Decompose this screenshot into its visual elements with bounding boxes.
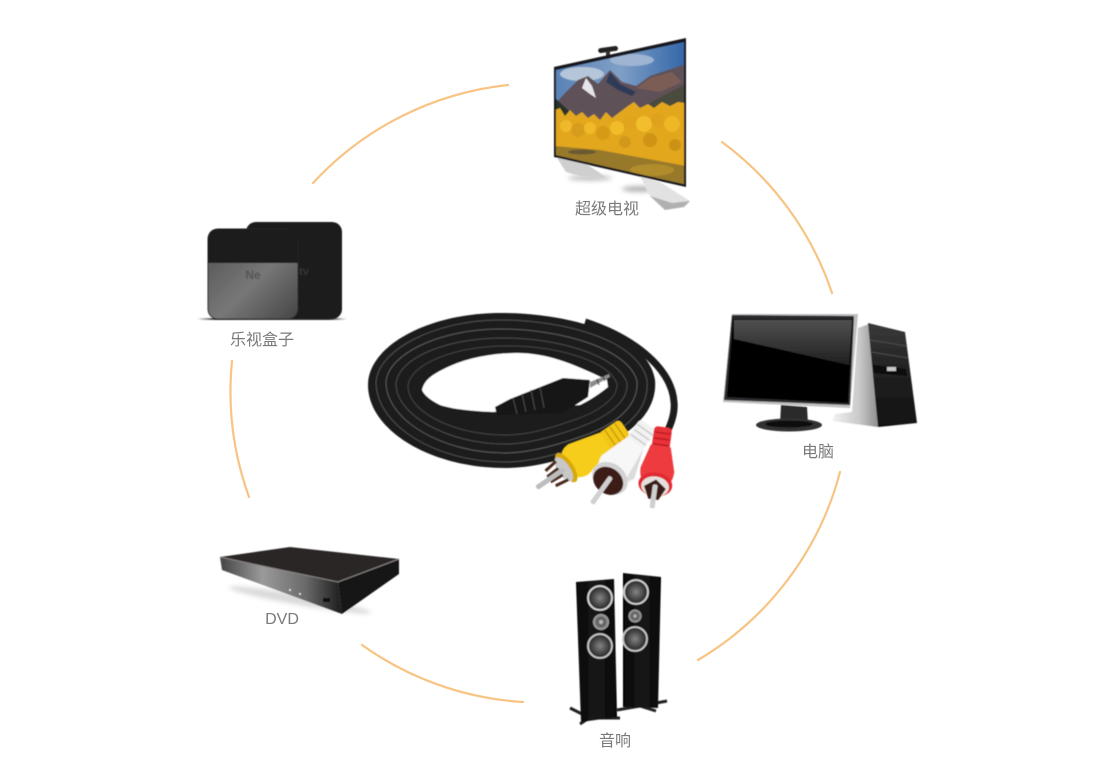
box shadow bbox=[197, 318, 347, 320]
AV cable bbox=[368, 313, 680, 515]
label: LeTV box: 乐视盒子 bbox=[230, 331, 294, 349]
monitor stand bbox=[756, 405, 822, 432]
outer strand bbox=[585, 322, 674, 432]
ring of orange arcs bbox=[230, 85, 840, 702]
device: desktop computer bbox=[723, 314, 917, 432]
label: computer: 电脑 bbox=[802, 443, 834, 461]
label: DVD: DVD bbox=[265, 611, 299, 628]
cable coil bbox=[368, 313, 655, 468]
rear box bbox=[246, 222, 342, 319]
infographic: devices around AV cable bbox=[198, 37, 918, 748]
3.5mm jack plug bbox=[495, 374, 610, 415]
DVD shadow bbox=[228, 583, 372, 617]
label: super TV: 超级电视 bbox=[575, 200, 639, 218]
front box bbox=[208, 229, 298, 319]
device: LeTV box bbox=[197, 222, 347, 320]
monitor screen reflection bbox=[734, 320, 852, 365]
tower bbox=[832, 323, 917, 427]
DVD body bbox=[220, 547, 399, 614]
TV screen: autumn mountain scene bbox=[555, 41, 685, 185]
TV camera bbox=[598, 46, 618, 56]
front speaker bbox=[570, 579, 620, 724]
rear box logo: tv bbox=[299, 266, 310, 278]
label: speakers: 音响 bbox=[599, 732, 631, 750]
TV frame bbox=[554, 38, 686, 187]
front box logo: Ne bbox=[245, 268, 261, 282]
monitor bbox=[723, 314, 858, 408]
yellow RCA plug bbox=[526, 413, 635, 503]
coil centre hole bbox=[422, 353, 608, 412]
red RCA plug bbox=[635, 425, 680, 511]
device: speakers bbox=[570, 573, 667, 724]
TV stand bbox=[557, 158, 690, 210]
device: super TV bbox=[550, 35, 690, 210]
rear speaker bbox=[617, 573, 667, 711]
white RCA plug bbox=[576, 413, 665, 515]
device: DVD player bbox=[220, 547, 399, 617]
